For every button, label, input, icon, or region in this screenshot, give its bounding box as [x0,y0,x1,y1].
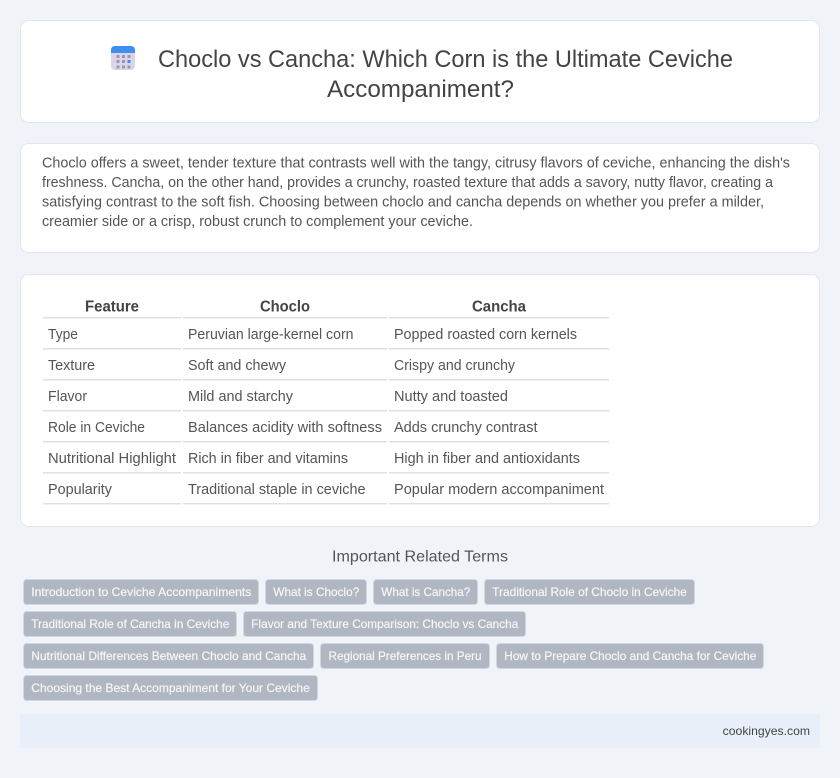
tag: role of choclo [484,580,694,604]
row: flavor [48,389,508,405]
summary paragraph: freshness. Cancha, on the other hand, provides a crunchy, roasted texture that adds a savory, nutty flavor, creating a [42,174,774,191]
row: nutritional highlight: Nutritional Highlight [48,451,176,467]
table header: Cancha [472,298,526,316]
tag: how to prepare [496,644,764,668]
tag: choosing the best: Choosing the Best Accompaniment for Your Ceviche [31,681,310,695]
panel: header [20,20,820,122]
panel: comparison table [20,274,820,526]
tag: role of choclo: Traditional Role of Choclo in Ceviche [492,585,687,599]
tag: flavor and texture: Flavor and Texture Comparison: Choclo vs Cancha [251,617,519,631]
row: type [48,327,577,343]
summary paragraph: Choclo offers a sweet, tender texture that contrasts well with the tangy, citrusy flavors of ceviche, enhancing the dish's [42,154,790,172]
row: type: Popped roasted corn kernels [394,327,577,343]
row: role in ceviche: Adds crunchy contrast [394,420,538,436]
heading: related terms: Important Related Terms [332,548,508,566]
row: type: Peruvian large-kernel corn [188,327,354,343]
row: texture: Soft and chewy [188,358,287,374]
tag: introduction [24,580,258,604]
panel: summary [20,144,820,252]
row: texture: Crispy and crunchy [394,358,516,374]
tag: introduction: Introduction to Ceviche Accompaniments [31,585,251,599]
tag: what is choclo: What is Choclo? [273,585,360,599]
icon: calendar [111,46,135,70]
row: flavor: Flavor [48,389,87,405]
row: popularity: Popular modern accompaniment [394,482,604,498]
row: flavor: Mild and starchy [188,389,294,405]
summary paragraph [42,154,790,230]
title [158,46,733,103]
row: role in ceviche [48,420,538,436]
row: nutritional highlight [48,451,580,467]
summary paragraph: satisfying contrast to the soft fish. Choosing between choclo and cancha depends on whether you prefer a milder, [42,194,764,210]
tag: nutritional differences [24,644,314,668]
tag: role of cancha: Traditional Role of Cancha in Ceviche [31,617,230,631]
related term tags [24,580,764,700]
table header: Choclo [260,298,310,316]
row: nutritional highlight: High in fiber and antioxidants [394,451,580,467]
summary paragraph: creamier side or a crisp, robust crunch to complement your ceviche. [42,213,473,230]
row: flavor: Nutty and toasted [394,389,508,405]
row: popularity [48,482,604,498]
tag: regional preferences: Regional Preferences in Peru [328,649,482,663]
tag: flavor and texture [244,612,526,636]
table header [85,298,526,316]
tag: role of cancha [24,612,236,636]
row: popularity: Popularity [48,482,113,498]
table header: Feature [85,298,139,316]
tag: what is choclo [266,580,366,604]
row: type: Type [48,327,78,343]
row: nutritional highlight: Rich in fiber and vitamins [188,451,348,467]
row: role in ceviche: Balances acidity with softness [188,420,382,436]
tag: nutritional differences: Nutritional Differences Between Choclo and Cancha [31,649,307,663]
footer bar [20,714,820,748]
row: role in ceviche: Role in Ceviche [48,420,145,436]
title: Accompaniment? [327,76,514,103]
row: popularity: Traditional staple in ceviche [188,482,366,498]
title: Choclo vs Cancha: Which Corn is the Ultimate Ceviche [158,46,733,73]
tag: how to prepare: How to Prepare Choclo and Cancha for Ceviche [504,649,757,663]
tag: choosing the best [24,676,318,700]
tag: regional preferences [320,644,490,668]
tag: what is cancha: What is Cancha? [381,585,471,599]
row: texture [48,358,516,374]
row: texture: Texture [48,358,95,374]
tag: what is cancha [374,580,478,604]
footer credit: cookingyes.com [723,724,810,738]
